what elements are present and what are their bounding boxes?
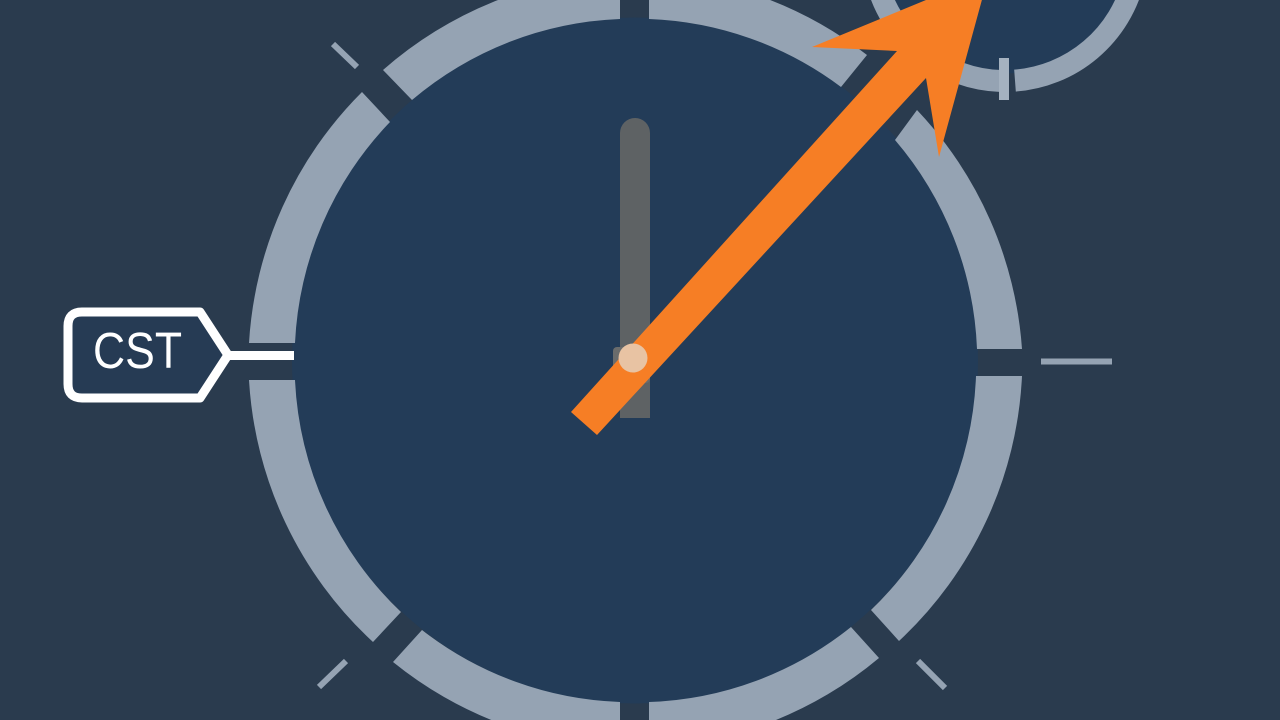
main clock face <box>292 18 978 704</box>
orange arrow <box>571 0 989 435</box>
label text: CST <box>93 322 182 379</box>
small clock dial, upper right <box>876 0 1134 100</box>
clock centre pivot <box>618 344 648 372</box>
CST time zone label <box>68 312 294 398</box>
clock ring segments <box>249 0 1022 720</box>
outer tick marks <box>319 44 1112 688</box>
grey minute hand <box>613 118 650 418</box>
